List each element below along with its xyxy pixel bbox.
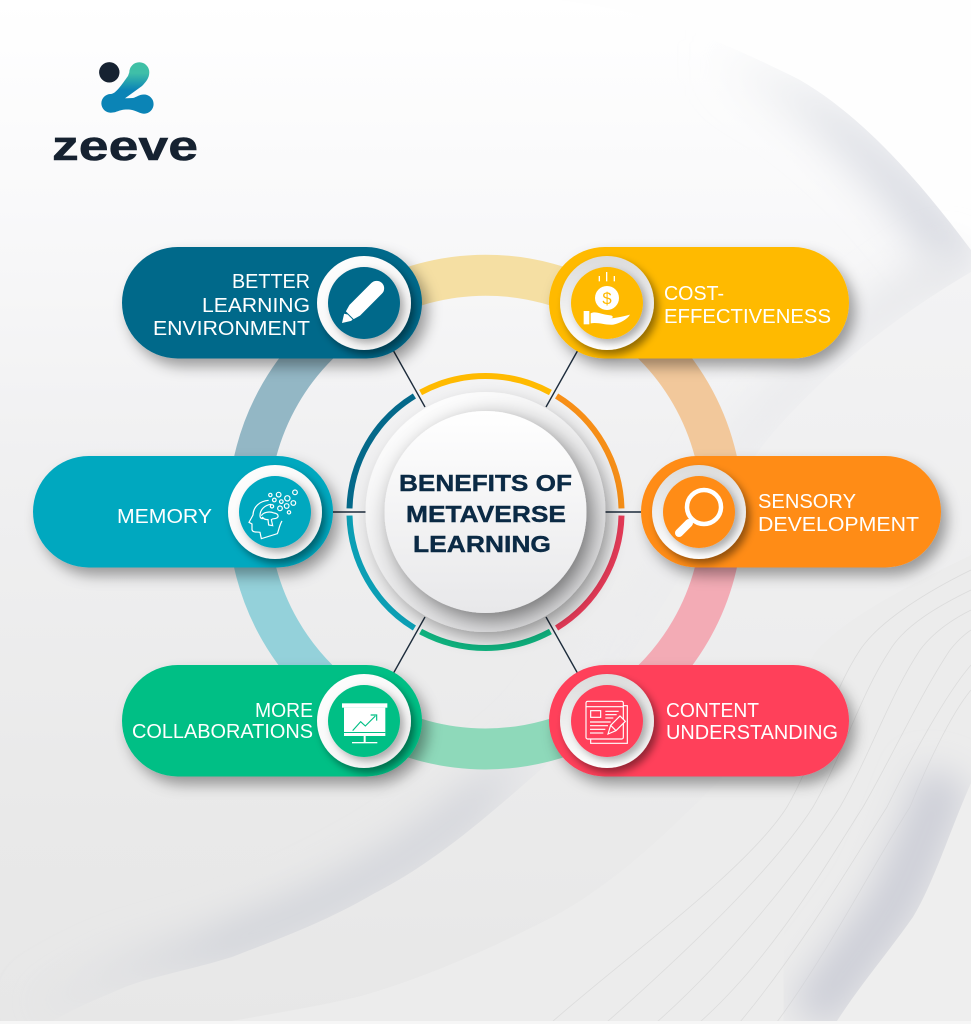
panel: memory [33,456,333,568]
label [132,700,313,743]
inner coloured arc ring [350,376,622,648]
icon: pencil [337,278,387,328]
label [153,271,310,340]
label: EFFECTIVENESS [664,306,831,328]
pill [122,665,422,776]
badge [652,465,746,559]
badge [228,465,322,559]
panel: better learning environment [122,247,422,358]
pill [641,456,941,568]
logo mark [99,62,154,114]
connector lines from pills to hub [333,350,641,674]
label: LEARNING [202,295,310,317]
label [664,283,831,328]
label: DEVELOPMENT [758,514,919,536]
icon: coin in hand: $ [602,289,612,308]
badge [317,256,411,350]
icon: document and pencil [586,701,627,743]
logo: zeeve [52,62,198,169]
label: COLLABORATIONS [132,721,313,743]
panel: cost-effectiveness [549,247,849,358]
icon: magnifier [679,490,721,533]
title [399,470,572,557]
title: METAVERSE [406,501,566,527]
hub inner disc [384,411,586,613]
label: COST- [664,283,724,305]
badge [317,674,411,768]
pill [549,247,849,358]
icon: presentation board [342,703,387,743]
label: BETTER [232,271,310,293]
pill [549,665,849,776]
outer ring: six tinted segments [248,275,722,749]
label: ENVIRONMENT [153,318,310,340]
label: CONTENT [666,700,759,722]
badge [560,674,654,768]
pill [122,247,422,358]
label [758,491,919,536]
title: LEARNING [413,531,551,557]
label: UNDERSTANDING [666,722,838,744]
icon: head with brain and bubbles [249,490,297,539]
badge [560,256,654,350]
logo wordmark: zeeve [52,122,198,169]
central hub [366,392,606,632]
label: SENSORY [758,491,856,513]
label [666,700,838,744]
label: MEMORY [117,506,212,528]
pill [33,456,333,568]
label: MORE [255,700,313,722]
hub outer disc [366,392,606,632]
icon: coin in hand [584,272,630,325]
panel: more collaborations [122,665,422,776]
panel: sensory development [641,456,941,568]
panel: content understanding [549,665,849,776]
title: BENEFITS OF [399,470,572,496]
